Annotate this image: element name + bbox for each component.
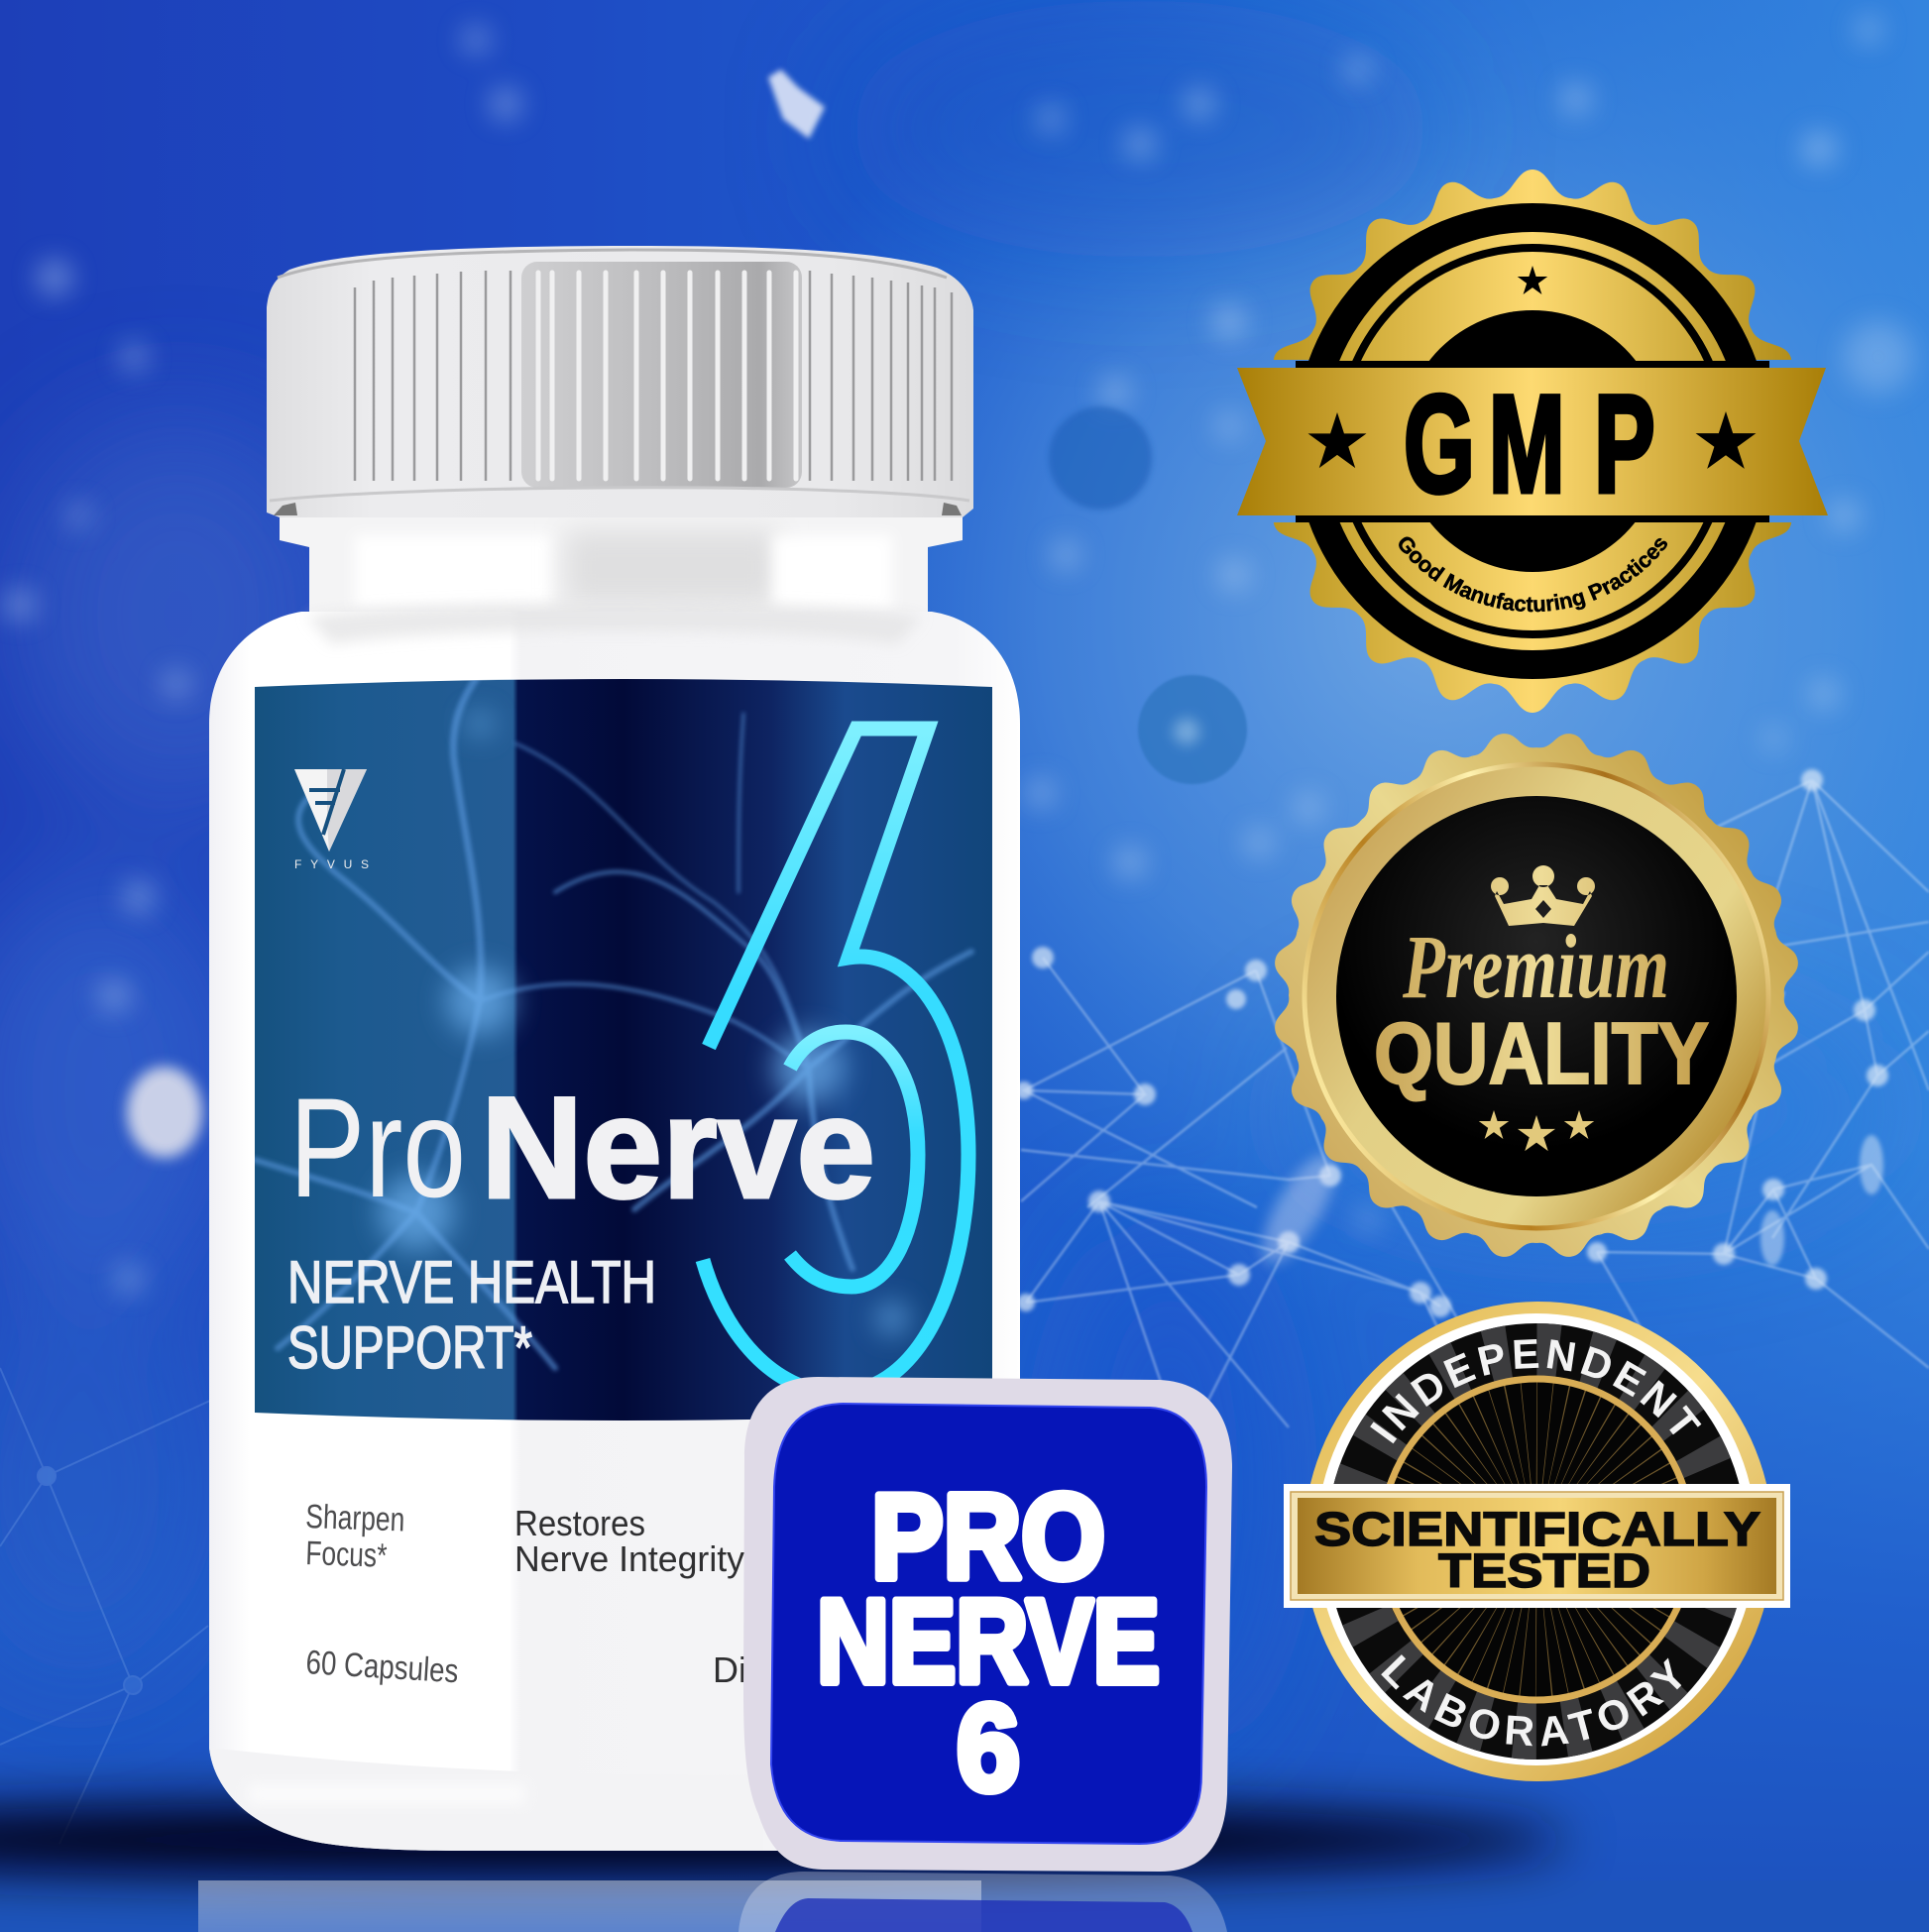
bottle small text: 60 Capsules (305, 1644, 460, 1690)
GMP text: GMP (1404, 368, 1655, 522)
inner gold ring (1381, 1379, 1692, 1700)
outer rings (1304, 1302, 1773, 1781)
scalloped edge (1269, 729, 1804, 1264)
badge text: 6 (957, 1680, 1020, 1817)
banner (1284, 1484, 1790, 1608)
arc text bottom: LABORATORY (1381, 1654, 1681, 1747)
banner text (1314, 1504, 1760, 1598)
scalloped edge (1259, 164, 1814, 719)
seal: Scientifically Tested (1284, 1302, 1790, 1781)
sunburst (1381, 1379, 1692, 1700)
network nodes (1015, 769, 1888, 1317)
badge text (817, 1469, 1160, 1817)
dark bubble (1049, 406, 1152, 510)
big outlined six (703, 729, 968, 1393)
bottle body (209, 612, 1020, 1851)
particle shard top (768, 69, 825, 139)
brand logo: FYVUS (294, 857, 369, 871)
product bottle (209, 246, 1020, 1851)
top star (1518, 266, 1547, 294)
neuron artwork (255, 679, 971, 1368)
stars (1479, 1110, 1594, 1151)
product label (255, 671, 992, 1429)
tagline (288, 1260, 653, 1370)
ring stripes (1346, 1351, 1727, 1732)
brand name (298, 1096, 872, 1200)
ribbon stars (1308, 411, 1756, 469)
banner text: TESTED (1438, 1545, 1650, 1598)
bottle small text: Di (713, 1649, 746, 1690)
bottle small text: Sharpen (305, 1498, 405, 1538)
particle blob left (127, 1067, 202, 1158)
bottle base band (209, 1748, 763, 1851)
badge text: PRO (871, 1469, 1105, 1604)
light streak (1249, 1145, 1348, 1274)
bottle small text (305, 1498, 746, 1690)
bottle highlight (248, 1784, 525, 1804)
network lines (1021, 780, 1929, 1437)
tagline: NERVE HEALTH (287, 1249, 656, 1315)
rings (1295, 203, 1770, 679)
floor shadow (0, 1800, 1929, 1932)
Premium: Premium (1402, 916, 1669, 1017)
bottle cap (267, 246, 973, 517)
bottle small text: Nerve Integrity (514, 1538, 744, 1579)
banner text: SCIENTIFICALLY (1314, 1504, 1760, 1556)
brand name: Pro (289, 1070, 466, 1227)
bottle small text: Focus* (305, 1534, 388, 1575)
badge text: NERVE (817, 1575, 1160, 1708)
reflection of bottle and badge (198, 1872, 1227, 1932)
seal: GMP (1237, 170, 1828, 713)
tagline: SUPPORT* (287, 1314, 532, 1381)
arc text top: INDEPENDENT (1370, 1339, 1701, 1443)
brand name: Nerve (481, 1067, 875, 1228)
seal: Premium Quality (1269, 729, 1804, 1264)
blurred bubble (1138, 675, 1247, 784)
QUALITY: QUALITY (1374, 1004, 1709, 1102)
gold rings (1305, 764, 1768, 1228)
ribbon (1237, 368, 1828, 515)
bottle small text: Restores (514, 1503, 645, 1543)
product name badge (743, 1377, 1232, 1872)
crown (1491, 865, 1595, 926)
arc text: Good Manufacturing Practices (1399, 537, 1667, 613)
bottle shoulder shading (307, 603, 922, 644)
cap ribs (355, 271, 952, 481)
bottle neck (280, 515, 963, 617)
network left faint (0, 1368, 238, 1844)
brand logo (294, 769, 369, 871)
